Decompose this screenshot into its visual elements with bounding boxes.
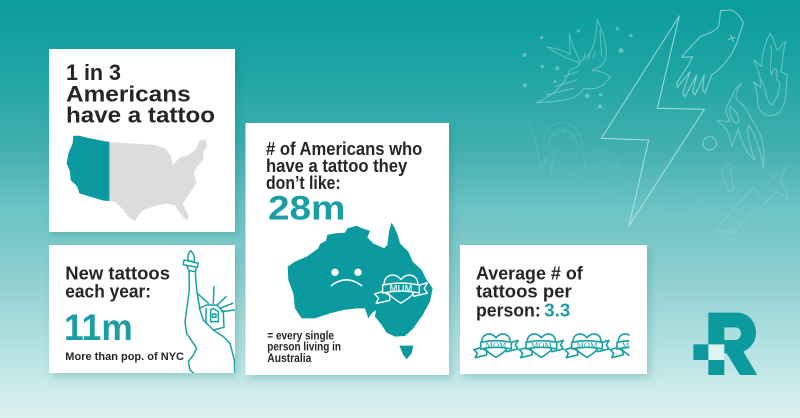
panel: 1 in 3 Americans [49,49,235,232]
icon: faded dagger [717,163,788,233]
heading: average number of tattoos per person: 3.3 [544,300,570,321]
heading: 1 in 3 Americans have a tattoo: 1 in 3 [66,60,121,85]
heading: # of Americans who have a tattoo they don't like [266,138,422,193]
number: 28m: 28m [268,189,346,227]
icon: small circle [703,137,716,150]
heading: new tattoos each year [65,262,170,302]
icon: MOM heart 3 [565,334,609,358]
heading: # of Americans who have a tattoo they don't like: # of Americans who [266,138,422,159]
icon: MOM heart 3: MOM [577,341,598,350]
caption: every single person living in Australia: person living in [267,342,341,354]
heading: # of Americans who have a tattoo they don't like: don’t like: [266,172,341,193]
logo: R mark [693,313,757,375]
number: 11m: 11m [64,307,133,348]
icon: tribal tattoo [717,83,764,168]
heading: average number of tattoos per person: tattoos per [476,281,572,302]
heading: 1 in 3 Americans have a tattoo [66,60,215,128]
icon: MOM heart 1 [474,334,518,358]
map: Australia with sad face and MUM tattoo [288,223,433,359]
icon: swallow [522,19,633,108]
heading: 1 in 3 Americans have a tattoo: Americans [66,82,191,106]
icon: MUM heart tattoo: MUM [390,284,412,295]
heading: new tattoos each year: each year: [65,281,151,302]
heading: average number of tattoos per person [476,262,584,321]
map: USA with one third highlighted [67,136,207,222]
icon: faded octopus tentacle [527,121,583,173]
icon: MUM heart tattoo [375,275,427,304]
icon: flames [753,33,788,116]
heading: 1 in 3 Americans have a tattoo: have a tattoo [66,102,215,128]
icon: MOM heart 4 clipped [610,333,630,358]
icon: sad face [331,269,362,286]
heading: # of Americans who have a tattoo they don't like: have a tattoo they [266,155,408,176]
icon: faded rose [658,188,705,215]
icon: MOM heart 4 clipped: MOM [622,341,643,350]
icon: statue of liberty [183,251,235,374]
panel: new tattoos each year [49,245,235,374]
icon: faded sunflower [573,148,628,197]
heading: new tattoos each year: New tattoos [65,262,170,283]
icon row: MOM heart tattoos [474,334,648,358]
panel: average tattoos per person [460,245,648,374]
heading: average number of tattoos per person: person: [476,300,541,321]
icon: lightning bolt [601,16,704,226]
heading: average number of tattoos per person: Average # of [476,262,584,283]
caption: every single person living in Australia [267,330,341,365]
icon: hand [677,10,743,97]
icon: MOM heart 2: MOM [531,341,552,350]
icon: MOM heart 2 [519,334,563,358]
caption: every single person living in Australia: Australia [267,353,312,365]
icon: MOM heart 1: MOM [486,341,507,350]
panel: Americans with a tattoo they don't like [246,123,449,375]
caption: more than pop of NYC: More than pop. of NYC [65,351,184,363]
background tattoo illustrations [522,10,788,233]
caption: every single person living in Australia: = every single [267,330,334,342]
